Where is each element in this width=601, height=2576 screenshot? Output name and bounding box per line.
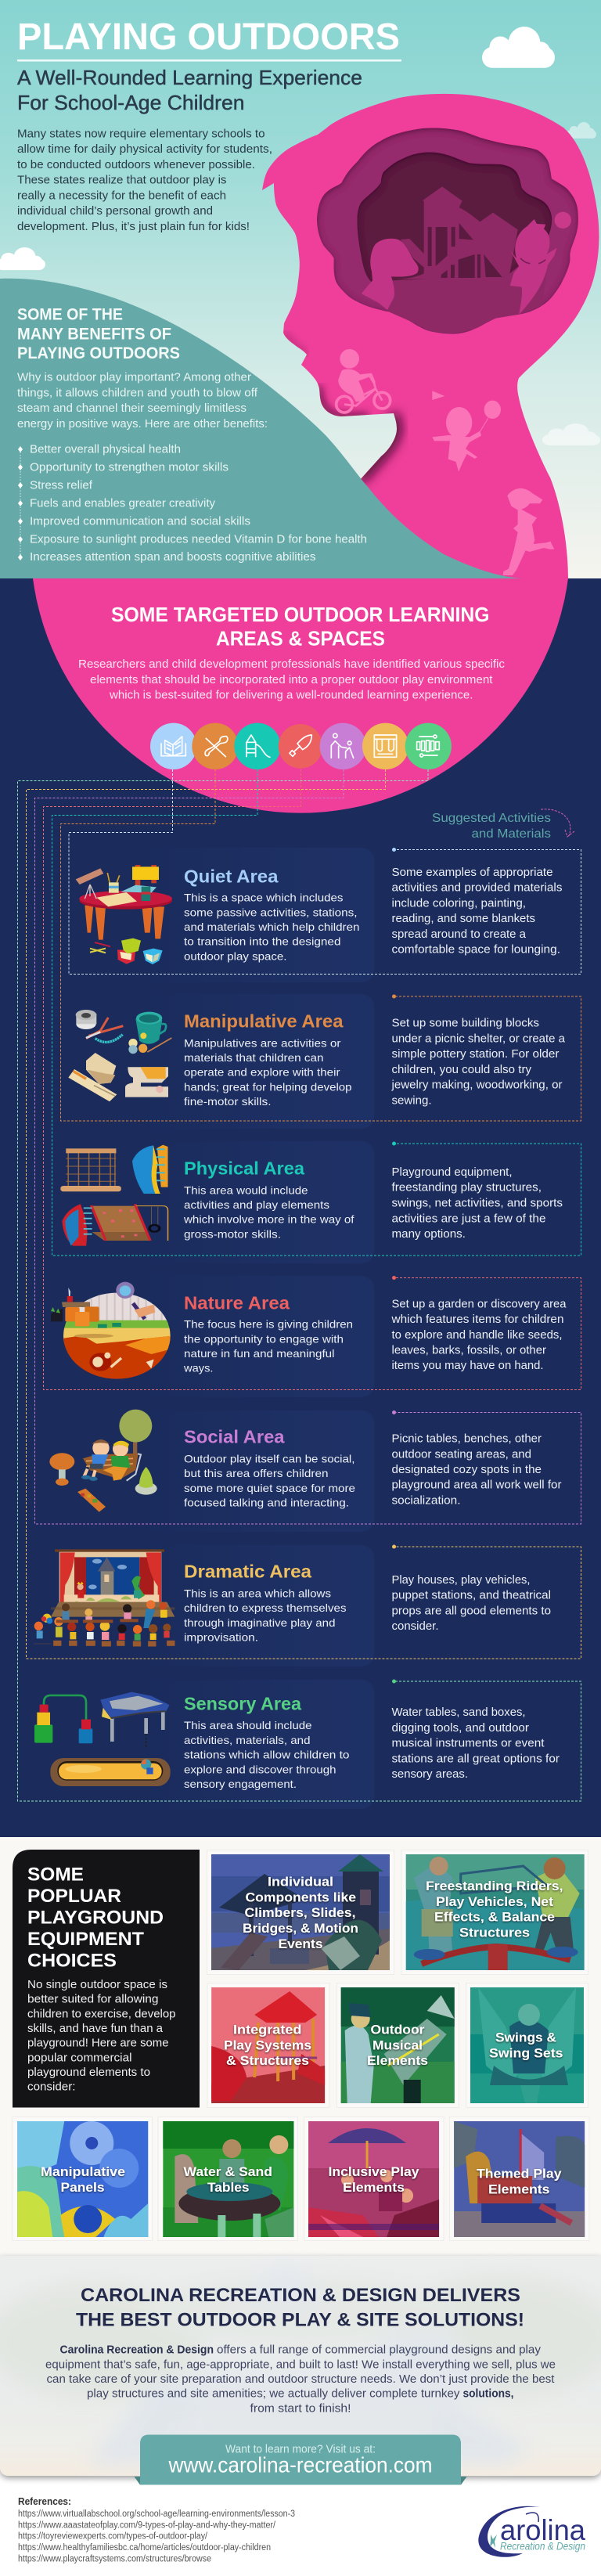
heading: equipment: CHOICES [27,1951,117,1971]
text: company description [45,2344,556,2416]
section: intro sky background [0,0,601,579]
text: description: some passive activities, stations, [184,906,357,919]
photo card: freestanding riders [406,1854,585,1970]
text: description: nature in fun and meaningful [184,1347,335,1360]
section: equipment choices background [0,1837,601,2260]
text: company description: Carolina Recreation & Design [59,2344,214,2356]
text: intro paragraph: development. Plus, it’s just plain fun for kids! [17,221,250,233]
text: suggested activities: which features items for children [390,1313,563,1326]
subtitle [17,66,362,114]
faint photo background [0,2262,601,2466]
logo: Carolina Recreation and Design: Recreation & Design [500,2539,585,2552]
label: Individual [268,1874,333,1890]
heading: equipment [27,1864,164,1971]
label: suggested activities: and Materials [471,827,551,841]
heading: Manipulative Area [184,1011,344,1032]
text: description [183,1318,353,1374]
text: intro paragraph: Many states now require elementary schools to [17,128,265,141]
label [243,1874,358,1951]
text: description: activities, materials, and [184,1734,310,1746]
brain layers with playground scene [317,128,578,334]
text: suggested activities: playground area all work well for [391,1479,562,1492]
connector end dots [392,848,396,1683]
text: description [184,1587,346,1644]
label [489,2030,563,2060]
text: company description: can take care of your site preparation and outdoor structure needs. We don’t just provide the best [47,2372,555,2386]
label [477,2167,562,2196]
heading: equipment: SOME [27,1864,84,1885]
text: learning areas intro [78,658,506,701]
heading: Dramatic Area [184,1561,311,1581]
banner: website link [135,2434,466,2484]
text: suggested activities: puppet stations, and theatrical [391,1589,551,1601]
label: Inclusive Play [329,2164,419,2179]
text: description: but this area offers children [184,1467,329,1479]
text: equipment intro: No single outdoor space is [27,1979,167,1991]
photo card: water and sand tables [163,2121,293,2237]
text: suggested activities: consider. [391,1620,438,1633]
label: & Structures [226,2053,309,2068]
list: benefits: Stress relief [30,479,93,492]
icon: girl with balloon [432,401,501,472]
list: benefits: Increases attention span and boosts cognitive abilities [30,551,316,564]
logo: Carolina Recreation and Design: arolina [500,2514,585,2546]
text: suggested activities: under a picnic shelter, or create a [391,1033,566,1046]
text: suggested activities: simple pottery station. For older [391,1048,560,1061]
text: suggested activities: items you may have on hand. [391,1360,543,1372]
text: suggested activities: socialization. [391,1495,460,1508]
text: suggested activities: sewing. [391,1094,432,1107]
panel: physical area [60,1145,563,1246]
panel: nature area [51,1282,567,1380]
text: suggested activities: stations are all great options for [391,1753,560,1766]
text: company description: play structures and site amenities; we actually deliver complete turnkey [87,2387,460,2400]
heading: learning areas: AREAS & SPACES [216,628,385,650]
illustration: bead maze, table and sandbox [34,1692,171,1786]
title block [17,16,401,233]
reference links: https://www.aaastateofplay.com/9-types-of-play-and-why-they-matter/ [18,2520,276,2530]
label: Musical [372,2038,423,2052]
label: Structures [459,1926,530,1940]
label: Water & Sand [183,2164,272,2179]
photo card: inclusive play [308,2121,439,2237]
text: benefits intro: energy in positive ways. Here are other benefits: [17,418,268,431]
text: intro paragraph: individual child’s personal growth and [17,205,213,218]
text: intro paragraph: allow time for daily physical activity for students, [17,143,272,156]
text: equipment intro: skills, and have fun than a [27,2023,164,2035]
text: suggested activities: outdoor seating areas, and [391,1448,531,1461]
text: suggested activities: Playground equipment, [391,1166,512,1179]
label: Play Systems [224,2038,311,2052]
text: description: materials that children can [184,1051,324,1064]
text: description: operate and explore with their [184,1066,340,1079]
text: suggested activities: to explore and handle like seeds, [391,1329,562,1342]
text: suggested activities: spread around to create a [391,928,527,941]
text: description: which involve more in the way of [183,1213,354,1226]
label: Themed Play [477,2167,562,2181]
reference links: https://www.playcraftsystems.com/structures/browse [18,2555,211,2564]
subtitle: For School-Age Children [17,91,244,114]
illustration: craft tools [68,1010,171,1101]
text: description: Outdoor play itself can be social, [184,1453,355,1465]
photo card: integrated play systems [211,1987,325,2103]
reference links: https://toyreviewexperts.com/types-of-outdoor-play/ [18,2531,208,2541]
heading: carolina recreation [76,2285,524,2331]
icon: cloud top right [482,27,555,68]
text: benefits intro: steam and channel their seemingly limitless [17,402,247,415]
heading: learning areas: SOME TARGETED OUTDOOR LEARNING [111,604,490,626]
icon: adult and child [320,723,366,769]
icon: book [150,723,196,769]
text: suggested activities [391,1574,551,1633]
text: description: sensory engagement. [184,1778,297,1790]
text: suggested activities: freestanding play structures, [391,1182,542,1194]
text: suggested activities [391,1706,560,1781]
text: description: fine-motor skills. [184,1095,271,1108]
label: Elements [343,2180,405,2195]
text: description: This area should include [184,1719,312,1731]
panel: call to action with faint photo [0,2256,601,2476]
heading: carolina recreation: CAROLINA RECREATION & DESIGN DELIVERS [81,2285,520,2306]
text: call prompt: Want to learn more? Visit us at: [225,2442,376,2456]
icon: stage curtains [362,723,408,769]
photo frames [13,1850,589,2240]
text: suggested activities: comfortable space for lounging. [391,944,560,957]
heading: Social Area [184,1426,285,1447]
label: Play Vehicles, Net [436,1894,553,1909]
text: description [184,891,360,963]
icon row: seven area icons [150,723,452,769]
heading: benefits: PLAYING OUTDOORS [17,344,180,362]
label [224,2023,311,2068]
reference links: https://www.healthyfamiliesbc.ca/home/articles/outdoor-play-children [18,2543,271,2553]
text: description: the opportunity to engage with [184,1332,344,1345]
text: description: focused talking and interacting. [184,1497,349,1509]
panel: social area [49,1410,562,1512]
label [367,2023,428,2068]
heading: Nature Area [184,1293,290,1313]
label: Events [279,1937,322,1951]
label [183,2164,272,2195]
illustration: garden and fossils [51,1282,172,1380]
text: equipment intro: playground! Here are some [27,2037,169,2049]
references: References: [18,2496,71,2507]
heading: equipment: PLAYGROUND [27,1907,164,1929]
label: suggested activities: Suggested Activities [432,812,551,825]
label: Swing Sets [489,2046,563,2060]
text: intro paragraph: These states realize that outdoor play is [17,174,227,186]
references [18,2496,295,2564]
label [426,1879,563,1940]
text: description: This is a space which includes [184,891,343,903]
text: description: children to express themselves [184,1601,346,1614]
photo card: swings [470,1987,584,2103]
photo card: manipulative panels [17,2121,148,2237]
text: company description: from start to finish! [250,2401,351,2416]
photo card: individual components [211,1854,390,1970]
text: description: improvisation. [184,1631,258,1644]
text: suggested activities: reading, and some blankets [391,913,535,925]
text: description [184,1719,350,1790]
panel: benefits hill [0,279,522,578]
photo card: themed play [454,2121,585,2237]
text: suggested activities: children, you could also try [391,1064,532,1076]
text: suggested activities: Some examples of appropriate [391,866,552,879]
label: Components like [246,1890,356,1905]
text: description: explore and discover through [184,1763,336,1775]
illustration: kids on bench [49,1410,157,1512]
list: benefits: Better overall physical health [30,443,181,456]
panel: equipment intro card [13,1850,200,2107]
icon: boy silhouette [510,219,557,315]
text: equipment intro: better suited for allowing [27,1993,158,2005]
text: suggested activities: Play houses, play vehicles, [391,1574,531,1587]
text: suggested activities: Set up some building blocks [391,1018,539,1030]
illustration: net, slide and climbing wall [60,1145,168,1246]
icon: child on bike [336,349,390,413]
icon: ball [555,212,571,229]
text: description: some more quiet space for more [184,1482,355,1494]
text: equipment intro: popular commercial [27,2052,131,2065]
text: suggested activities: swings, net activities, and sports [391,1198,563,1210]
illustration: table, telescope and blocks [76,865,172,964]
text: description: to transition into the designed [184,935,341,947]
reference links [18,2509,295,2564]
label: Outdoor [371,2023,425,2037]
title block: PLAYING OUTDOORS [17,16,400,58]
text: company description: offers a full range of commercial playground designs and play [217,2344,541,2356]
text: suggested activities: jewelry making, woodworking, or [390,1079,563,1091]
label [329,2164,419,2195]
arrow: dashed to activities [541,809,574,837]
logo: Carolina Recreation and Design [478,2506,585,2557]
text: description [184,1453,355,1509]
text: intro paragraph: to be conducted outdoors whenever possible. [17,159,255,171]
text: company description: equipment that’s safe, fun, age-appropriate, and built to last! We install everything we sell, plus we [45,2358,556,2372]
text: company description: solutions, [463,2387,513,2400]
text: intro paragraph: really a necessity for the benefit of each [17,189,226,202]
label: Bridges, & Motion [243,1921,358,1936]
text: description: hands; great for helping develop [184,1080,352,1093]
icon: xylophone [405,723,452,769]
icon: running girl [503,488,554,575]
connectors: dashed lines from icons to area boxes [17,769,581,1801]
text: equipment intro: children to exercise, develop [27,2009,176,2021]
text: description: This area would include [184,1184,308,1196]
label: Climbers, Slides, [244,1905,355,1920]
heading: equipment: EQUIPMENT [27,1929,144,1950]
label: Freestanding Riders, [426,1879,563,1893]
text: suggested activities: musical instruments or event [391,1738,545,1750]
text: suggested activities: Water tables, sand boxes, [391,1706,526,1719]
area card backgrounds [102,848,374,1809]
panel: manipulative area [68,1010,566,1108]
ground and playground structure [381,186,550,334]
heading: Quiet Area [184,866,279,886]
text: benefits intro: Why is outdoor play important? Among other [17,371,251,384]
text: suggested activities: props are all good elements to [391,1605,551,1617]
list: benefits [18,443,367,564]
panel: sensory area [34,1692,560,1790]
text: description: The focus here is giving children [184,1318,353,1331]
heading: learning areas [111,604,490,650]
icon: girl silhouette [362,239,419,310]
text: url: www.carolina-recreation.com [168,2453,432,2477]
list: benefits: Exposure to sunlight produces needed Vitamin D for bone health [30,534,367,546]
text: suggested activities: sensory areas. [391,1768,468,1781]
section: learning areas navy background [0,578,601,1837]
list: benefits: Improved communication and social skills [30,515,250,528]
icon: faint cloud right [567,122,596,139]
text: description: activities and play elements [184,1198,329,1211]
text: suggested activities: many options. [391,1228,466,1241]
text: learning areas intro: Researchers and child development professionals have identified various specific [78,658,506,671]
text: description: Manipulatives are activities or [184,1036,341,1049]
text: suggested activities [391,866,562,957]
text: description: stations which allow children to [184,1749,350,1761]
heading: benefits: MANY BENEFITS OF [17,326,171,343]
text: equipment intro: consider: [27,2081,75,2093]
text: equipment intro: playground elements to [27,2066,150,2079]
label: Integrated [233,2023,302,2037]
text: description: through imaginative play and [184,1616,335,1629]
icon: shuttlecock [432,391,444,400]
text: description [184,1036,352,1108]
text: suggested activities [391,1166,563,1241]
heading: carolina recreation: THE BEST OUTDOOR PLAY & SITE SOLUTIONS! [76,2309,524,2331]
text: description: gross-motor skills. [184,1227,281,1240]
illustration: stage and audience [34,1549,175,1646]
text: suggested activities: Set up a garden or discovery area [391,1298,567,1310]
icon: shovel [279,724,322,769]
text: intro paragraph [17,128,272,233]
panel: quiet area [76,865,562,964]
label: Effects, & Balance [434,1910,555,1924]
list: benefits: Fuels and enables greater creativity [30,498,216,510]
label: Manipulative [41,2164,125,2179]
icon: crossed tools [192,723,239,769]
heading: Sensory Area [184,1694,301,1714]
text: learning areas intro: which is best-suited for delivering a well-rounded learning experience. [109,689,473,701]
icon: cloud left [0,247,45,270]
text: description: and materials which help children [184,921,360,933]
text: description [183,1184,354,1240]
heading: benefits [17,305,180,362]
text: suggested activities: activities are just a few of the [391,1213,546,1226]
text: benefits intro [17,371,268,431]
text: suggested activities [390,1018,566,1107]
icon: faint cloud lower right [542,423,600,445]
text: learning areas intro: elements that should be incorporated into a proper outdoor play environment [90,673,493,686]
label: Elements [488,2182,549,2196]
text: suggested activities: activities and provided materials [391,881,562,894]
heading: Physical Area [184,1158,304,1179]
text: description: This is an area which allows [184,1587,331,1600]
children silhouettes on neck [336,349,554,575]
text: equipment intro [27,1979,176,2093]
text: suggested activities: digging tools, and outdoor [391,1722,529,1735]
text: description: outdoor play space. [184,950,286,963]
text: suggested activities [390,1298,567,1372]
heading: benefits: SOME OF THE [17,305,123,324]
text: suggested activities [391,1432,562,1508]
label: Swings & [495,2030,556,2045]
text: description: ways. [183,1362,213,1374]
label [41,2164,125,2195]
label: Tables [207,2180,249,2195]
text: benefits intro: things, it allows children and youth to blow off [17,387,258,399]
text: suggested activities: designated cozy spots in the [391,1464,542,1476]
list: benefits: Opportunity to strengthen motor skills [30,462,229,474]
label: Elements [367,2053,428,2068]
photo card: outdoor musical elements [341,1987,455,2103]
panel: dramatic area [34,1549,551,1646]
label: suggested activities [432,809,574,841]
heading: equipment: POPLUAR [27,1886,121,1907]
illustration: child head silhouette [262,94,599,578]
label: Panels [61,2180,105,2195]
pink semicircle [33,578,568,813]
text: suggested activities: leaves, barks, fossils, or other [391,1345,546,1357]
reference links: https://www.virtuallabschool.org/school-age/learning-environments/lesson-3 [18,2509,295,2519]
icon: slide tower [234,723,281,769]
text: suggested activities: Picnic tables, benches, other [391,1432,542,1445]
text: suggested activities: include coloring, painting, [391,897,526,910]
subtitle: A Well-Rounded Learning Experience [17,66,362,89]
